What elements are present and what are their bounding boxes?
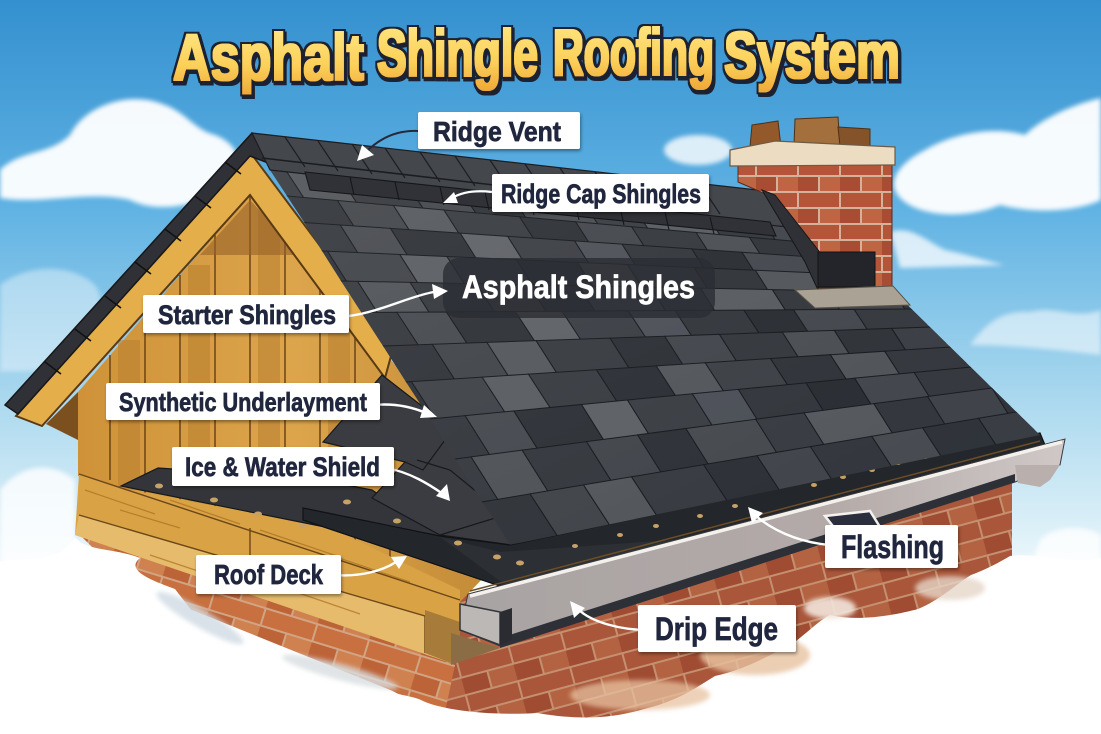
label: Ridge Vent [357, 112, 580, 161]
asphalt shingle field [270, 170, 1040, 545]
bottom white cloud base [0, 538, 1101, 734]
label: Starter Shingles: Starter Shingles [158, 300, 336, 330]
ice and water shield sheet [121, 468, 512, 590]
label: Ridge Vent: Ridge Vent [433, 116, 561, 147]
label: Ridge Cap Shingles: Ridge Cap Shingles [501, 179, 701, 209]
title: Roofing [553, 15, 714, 89]
brick foundation wall [75, 470, 1012, 720]
label: Synthetic Underlayment: Synthetic Underlayment [119, 387, 367, 417]
label: Roof Deck [196, 555, 407, 594]
drip edge and flashing band [155, 428, 1045, 590]
chimney [730, 117, 910, 308]
label: Asphalt Shingles: Asphalt Shingles [462, 269, 695, 305]
label: Ridge Cap Shingles [443, 174, 709, 212]
roof deck boards [75, 474, 500, 665]
label: Ice & Water Shield [172, 447, 450, 501]
ridge cap shingles [305, 172, 776, 236]
label: Asphalt Shingles [443, 258, 715, 318]
gable fascia board [16, 152, 394, 426]
ridge vent [252, 133, 833, 232]
title: System [724, 18, 900, 92]
starter and underlayment layers [323, 375, 512, 545]
label: Drip Edge [570, 601, 796, 652]
clouds in sky [0, 98, 1101, 575]
title: Shingle [377, 16, 538, 90]
cloud smudges over brick [152, 576, 985, 710]
label: Flashing: Flashing [841, 529, 944, 565]
gable edge shingles [5, 133, 292, 414]
label: Roof Deck: Roof Deck [214, 559, 323, 590]
gutter / drip edge [460, 439, 1065, 648]
label: Drip Edge: Drip Edge [655, 611, 778, 647]
label: Flashing [748, 507, 958, 568]
title [173, 15, 900, 94]
label: Ice & Water Shield: Ice & Water Shield [185, 452, 380, 482]
title: Asphalt [173, 20, 364, 94]
gable wood wall [46, 195, 515, 602]
label: Starter Shingles [143, 284, 448, 333]
